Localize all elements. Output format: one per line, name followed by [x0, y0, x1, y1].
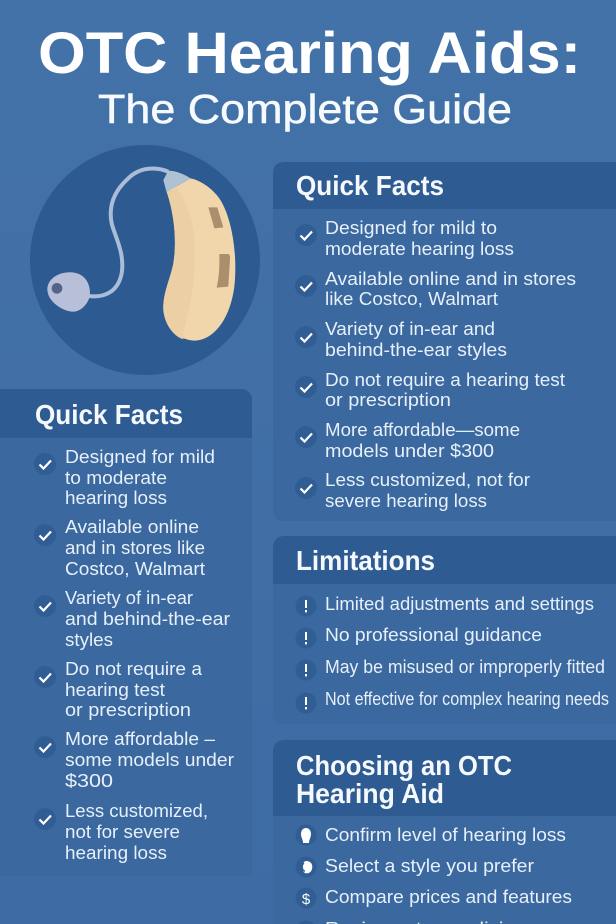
list item: no test	[34, 658, 203, 720]
list item: available	[295, 268, 576, 309]
list item: variety	[34, 587, 230, 650]
panel header: quick facts right: Quick Facts	[296, 170, 444, 201]
list item: mild to moderate	[34, 446, 215, 508]
panel: limitations	[273, 536, 616, 724]
list item: variety: behind-the-ear styles	[325, 339, 507, 360]
panel: quick facts right	[273, 162, 616, 521]
list item: mild to moderate: Designed for mild	[65, 446, 215, 467]
panel header: limitations: Limitations	[296, 545, 435, 576]
list item: less customized	[34, 800, 208, 863]
panel header: choosing: Hearing Aid	[296, 778, 444, 809]
list item: no test: or prescription	[325, 389, 451, 410]
list item: variety: and behind-the-ear	[65, 608, 230, 629]
list item: affordable	[295, 419, 520, 461]
list item: mild to moderate: moderate hearing loss	[325, 238, 514, 259]
list item: affordable: some models under	[65, 749, 234, 770]
list item: select style: Select a style you prefer	[325, 855, 534, 876]
title: OTC Hearing Aids:	[38, 21, 581, 86]
list item: limited adjustments: Limited adjustments and settings	[325, 593, 594, 614]
list item: available: Available online	[65, 516, 199, 537]
list item: no test: or prescription	[65, 699, 191, 720]
list item: affordable	[34, 728, 234, 791]
list item: no test: Do not require a	[65, 658, 203, 679]
icon: hearing aid in circle	[30, 145, 260, 375]
list item: confirm level: Confirm level of hearing loss	[325, 824, 566, 845]
list item: mild to moderate: Designed for mild to	[325, 217, 497, 238]
panel header: limitations	[273, 536, 616, 584]
list item: no test: Do not require a hearing test	[325, 369, 565, 390]
list item: compare prices: $	[302, 891, 311, 908]
list item: mild to moderate: to moderate	[65, 467, 167, 488]
panel header: choosing	[273, 740, 616, 816]
list item: variety	[295, 318, 507, 360]
list item: variety: styles	[65, 629, 113, 650]
list item: mild to moderate: hearing loss	[65, 487, 167, 508]
panel: quick facts left	[0, 389, 252, 876]
list item: available: Costco, Walmart	[65, 558, 205, 579]
list item: affordable: More affordable—some	[325, 419, 520, 440]
list item: variety: Variety of in-ear	[65, 587, 193, 608]
panel header: quick facts left: Quick Facts	[35, 399, 183, 430]
panel header: quick facts right	[273, 162, 616, 209]
list item: misused: May be misused or improperly fitted	[325, 656, 605, 677]
subtitle: The Complete Guide	[98, 86, 512, 132]
list item: available: Available online and in stores	[325, 268, 576, 289]
list item: less customized: severe hearing loss	[325, 490, 487, 511]
list item: compare prices: Compare prices and features	[325, 886, 572, 907]
list item: affordable: More affordable –	[65, 728, 216, 749]
list item: less customized: Less customized,	[65, 800, 208, 821]
list item: variety: Variety of in-ear and	[325, 318, 495, 339]
panel: choosing an OTC hearing aid	[273, 740, 616, 924]
list item: no test: hearing test	[65, 679, 165, 700]
list item: no test	[295, 369, 565, 410]
list item: affordable: $300	[65, 770, 113, 791]
panel header: quick facts left	[0, 389, 252, 438]
list item: less customized: Less customized, not for	[325, 469, 530, 490]
list item: available: and in stores like	[65, 537, 205, 558]
list item: affordable: models under $300	[325, 440, 494, 461]
panel header: choosing: Choosing an OTC	[296, 750, 512, 781]
list item: available	[34, 516, 205, 579]
list item: less customized: hearing loss	[65, 842, 167, 863]
list item: no guidance: No professional guidance	[325, 624, 542, 645]
list item: mild to moderate	[295, 217, 514, 259]
list item: less customized	[295, 469, 530, 511]
list item: less customized: not for severe	[65, 821, 180, 842]
list item: available: like Costco, Walmart	[325, 288, 498, 309]
